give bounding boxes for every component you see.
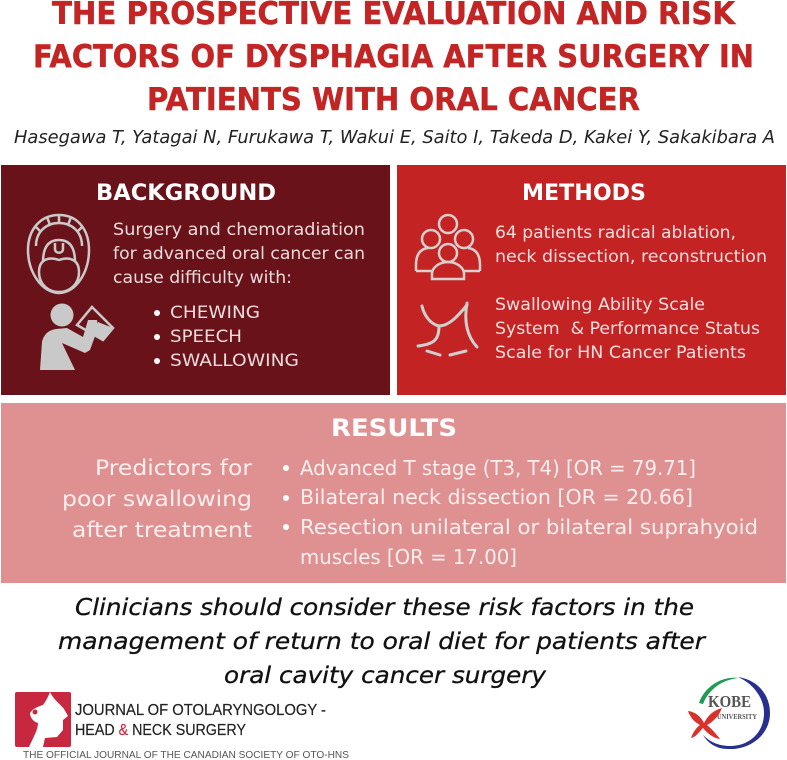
conclusion: Clinicians should consider these risk factors in the	[75, 595, 694, 621]
conclusion	[58, 595, 707, 689]
icon: open mouth	[28, 215, 89, 293]
kobe university logo	[688, 677, 770, 749]
panel: methods	[397, 165, 786, 395]
journal logo	[15, 692, 349, 760]
panel: background	[1, 165, 390, 395]
list of difficulties	[154, 303, 299, 371]
journal name: HEAD & NECK SURGERY	[75, 722, 246, 739]
predictor list: Resection unilateral or bilateral suprahyoid	[300, 515, 758, 539]
kobe university logo: UNIVERSITY	[717, 712, 757, 721]
title: FACTORS OF DYSPHAGIA AFTER SURGERY IN	[33, 39, 754, 75]
logo rings	[703, 677, 770, 749]
methods text: neck dissection, reconstruction	[495, 247, 767, 267]
list of difficulties: CHEWING	[170, 303, 260, 323]
heading: methods: METHODS	[522, 181, 646, 206]
background text: cause difficulty with:	[113, 268, 292, 288]
list of difficulties: SWALLOWING	[170, 351, 299, 371]
heading: background: BACKGROUND	[96, 181, 276, 206]
predictor list: muscles [OR = 17.00]	[300, 545, 517, 569]
predictor list: Advanced T stage (T3, T4) [OR = 79.71]	[300, 456, 696, 480]
logo text: KOBE	[708, 692, 751, 711]
icon: patient group	[416, 215, 480, 279]
background text: Surgery and chemoradiation	[113, 220, 365, 240]
methods text	[495, 223, 767, 363]
conclusion: management of return to oral diet for patients after	[58, 629, 707, 655]
panel: results	[1, 403, 786, 583]
predictors label: after treatment	[72, 518, 252, 542]
predictor list: Bilateral neck dissection [OR = 20.66]	[300, 485, 693, 509]
predictors label: Predictors for	[95, 456, 252, 480]
title	[33, 0, 754, 118]
methods text: 64 patients radical ablation,	[495, 223, 736, 243]
journal name	[75, 702, 326, 739]
icon: person reading	[40, 304, 113, 370]
list of difficulties: SPEECH	[170, 327, 242, 347]
icon: journal head	[15, 692, 71, 747]
predictors label	[62, 456, 252, 542]
methods text: System & Performance Status	[495, 319, 760, 339]
conclusion: oral cavity cancer surgery	[224, 663, 546, 689]
title: PATIENTS WITH ORAL CANCER	[147, 82, 640, 118]
authors: Hasegawa T, Yatagai N, Furukawa T, Wakui E, Saito I, Takeda D, Kakei Y, Sakakibara A	[14, 128, 775, 148]
journal name: JOURNAL OF OTOLARYNGOLOGY -	[75, 702, 326, 719]
logo red mark	[688, 708, 722, 739]
methods text: Swallowing Ability Scale	[495, 295, 705, 315]
predictor list	[283, 456, 758, 569]
icon: neck	[418, 303, 477, 355]
background text	[113, 220, 365, 288]
methods text: Scale for HN Cancer Patients	[495, 343, 746, 363]
heading: results: RESULTS	[331, 414, 457, 442]
background text: for advanced oral cancer can	[113, 244, 365, 264]
predictors label: poor swallowing	[62, 487, 252, 511]
